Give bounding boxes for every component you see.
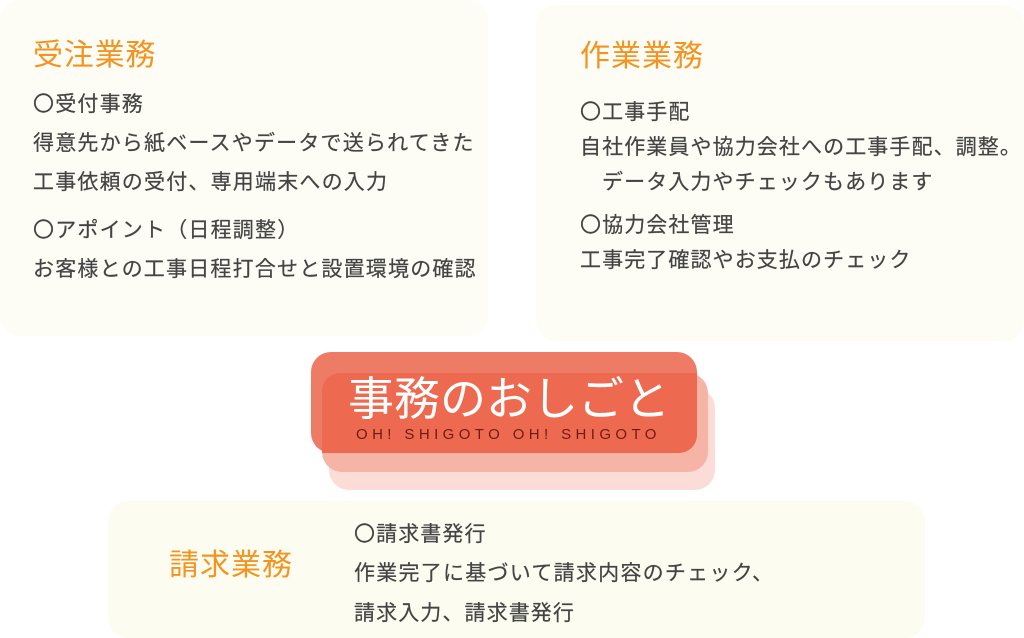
text: アポイント line: お客様との工事日程打合せと設置環境の確認	[33, 258, 477, 281]
badge layer: main	[311, 352, 697, 453]
title text: 事務のおしごと	[348, 373, 670, 425]
badge layer: light	[322, 373, 708, 472]
badge layer: lightest	[329, 388, 715, 490]
heading: 請求業務: 請求業務	[169, 549, 293, 582]
badge layer: overlap	[322, 373, 697, 453]
text: 協力会社管理 line: 工事完了確認やお支払のチェック	[580, 249, 912, 272]
text: 工事手配 heading: 〇工事手配	[580, 101, 690, 124]
text: 工事手配 line 1: 自社作業員や協力会社への工事手配、調整。	[580, 136, 1022, 159]
subtitle text: OH! SHIGOTO OH! SHIGOTO	[356, 426, 661, 443]
text: 工事手配 line 2: データ入力やチェックもあります	[602, 171, 934, 194]
heading: 作業業務: 作業業務	[580, 40, 704, 73]
text: 受付事務 line 2: 工事依頼の受付、専用端末への入力	[33, 171, 388, 194]
panel: 請求業務	[108, 501, 925, 638]
text: 請求書発行 line 2: 請求入力、請求書発行	[354, 602, 575, 625]
panel: 作業業務	[536, 5, 1024, 341]
heading: 受注業務: 受注業務	[33, 39, 156, 72]
central title badge	[311, 352, 715, 490]
text: 請求書発行 heading: 〇請求書発行	[354, 523, 487, 546]
panel: 受注業務	[0, 0, 488, 336]
text: 協力会社管理 heading: 〇協力会社管理	[580, 214, 735, 237]
text: 受付事務 heading: 〇受付事務	[33, 93, 144, 116]
text: 請求書発行 line 1: 作業完了に基づいて請求内容のチェック、	[354, 562, 774, 585]
text: アポイント heading: 〇アポイント（日程調整）	[33, 219, 299, 242]
text: 受付事務 line 1: 得意先から紙ベースやデータで送られてきた	[33, 132, 475, 155]
